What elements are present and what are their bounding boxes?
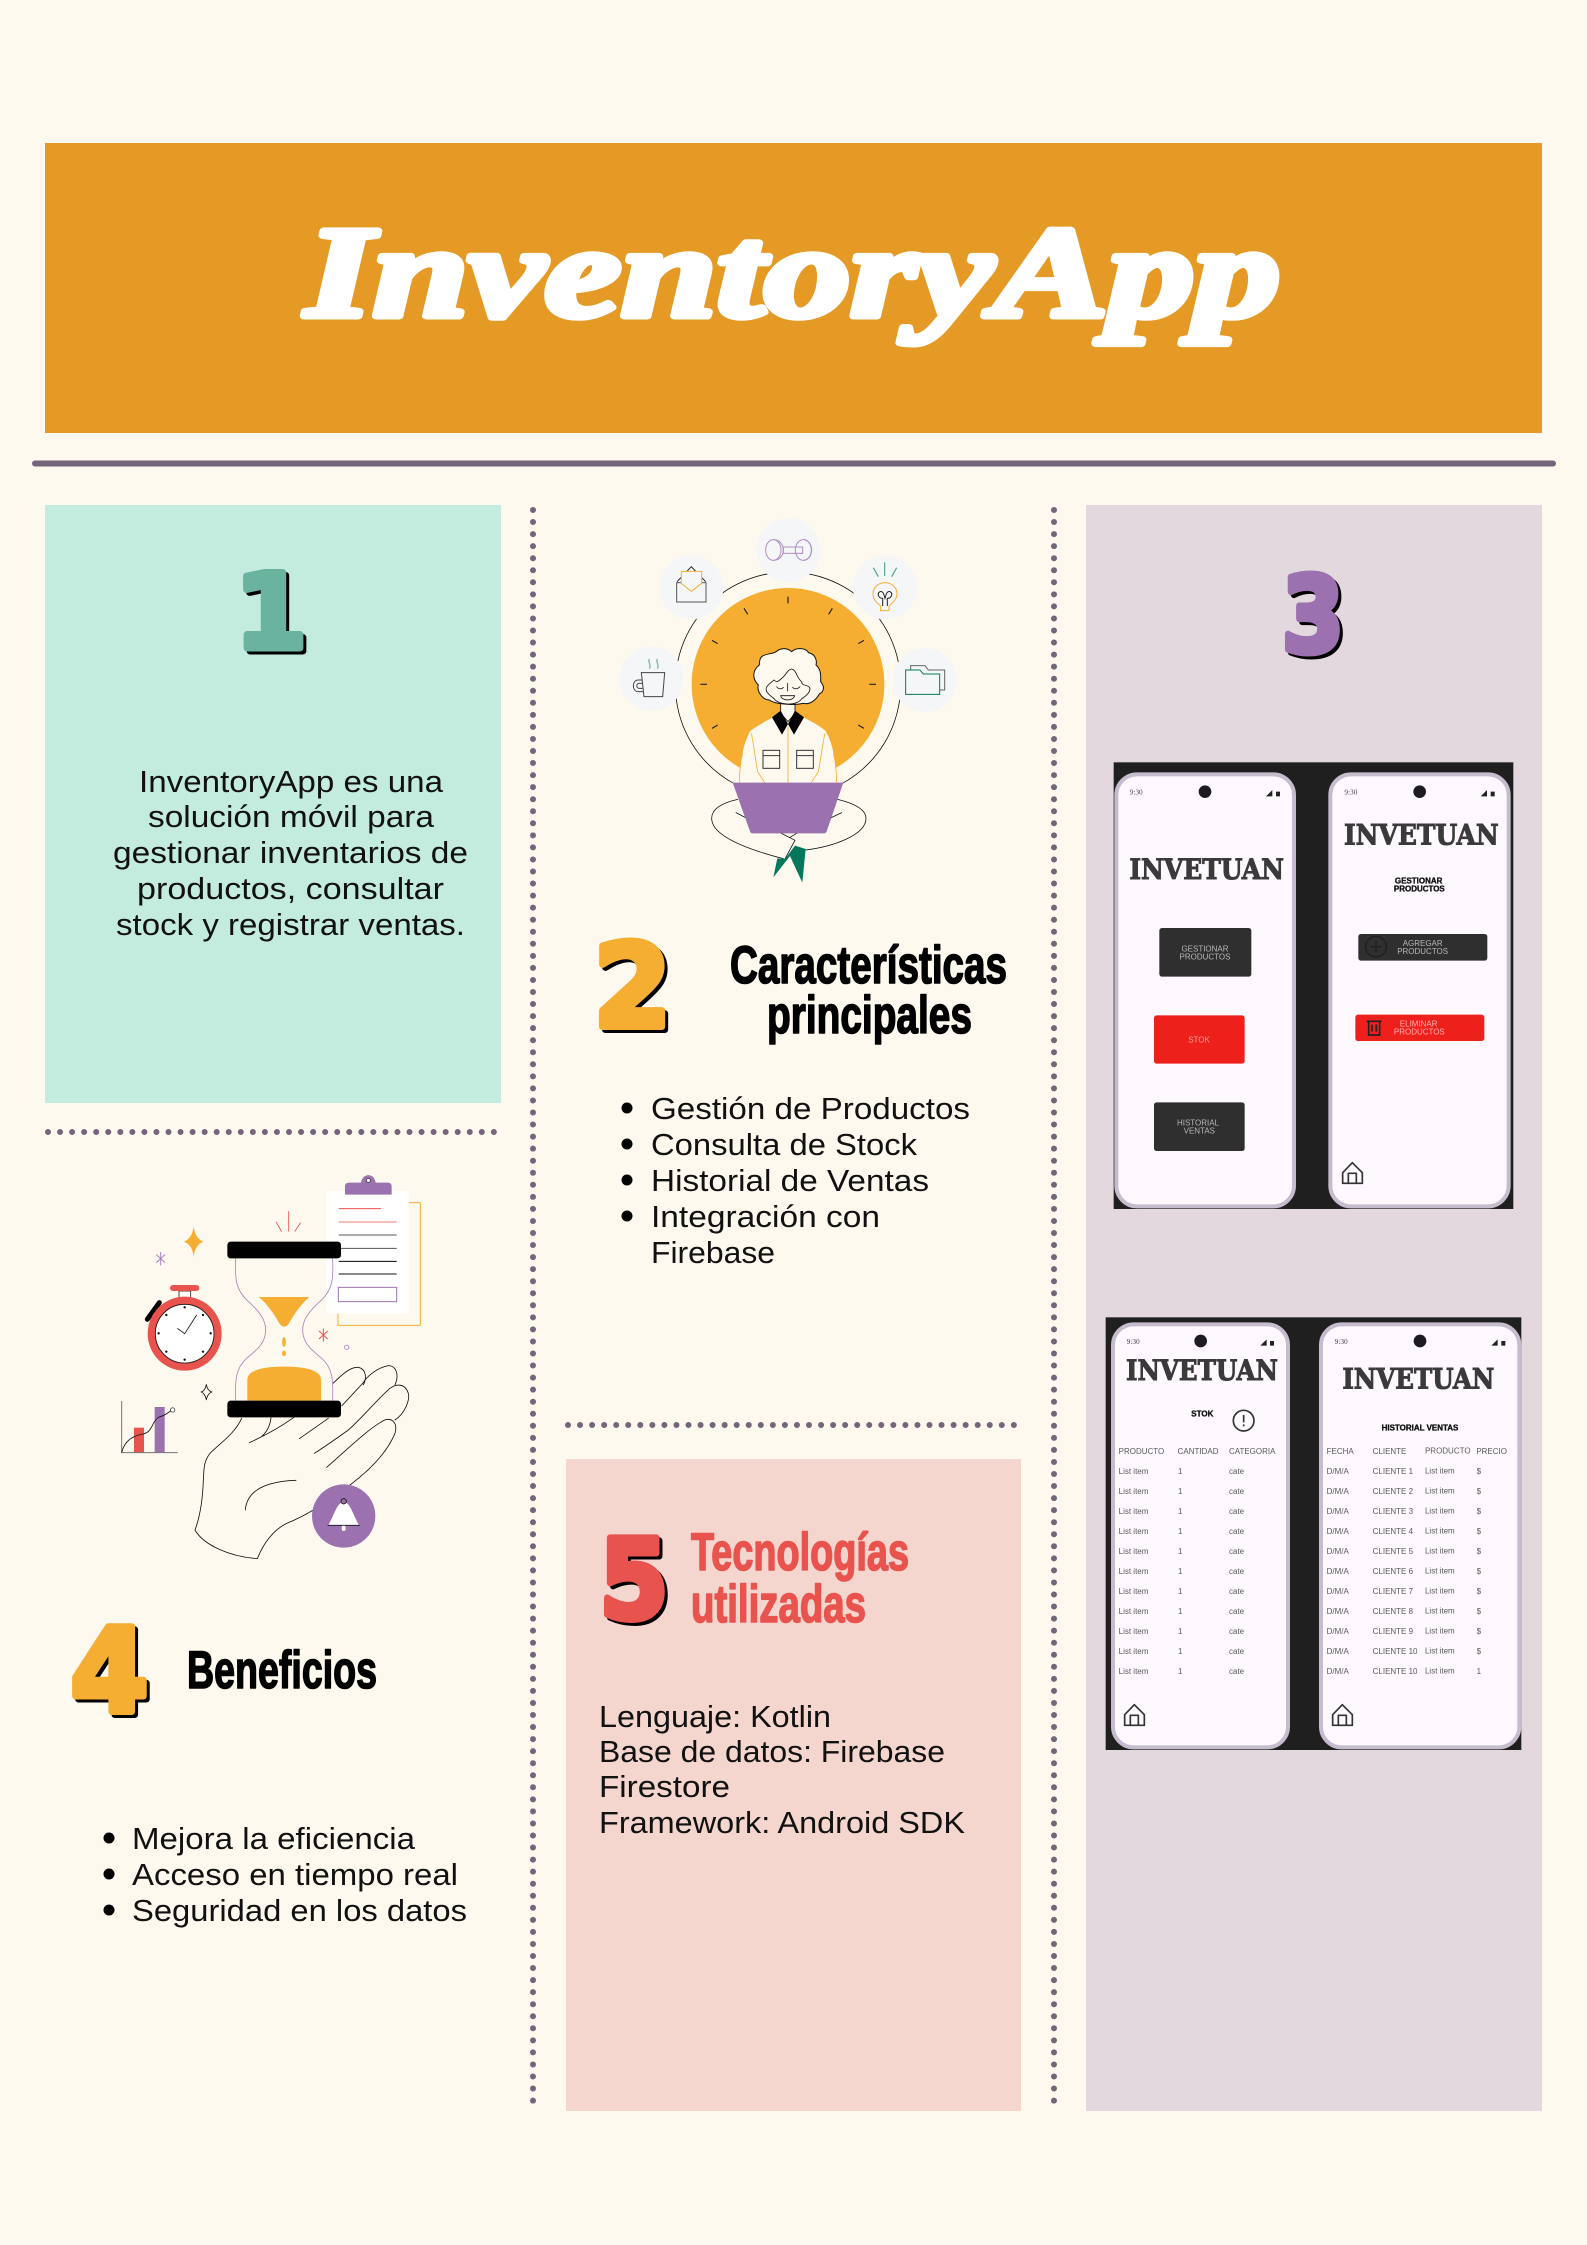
- description text: gestionar inventarios de: [113, 835, 468, 870]
- feature list: Gestión de Productos: [651, 1091, 970, 1126]
- number 5: 5: [602, 1519, 672, 1647]
- panel 3: app screenshots: [1086, 505, 1542, 2111]
- phone: stock: 1: [1178, 1487, 1183, 1496]
- phone: sales history: 1: [1477, 1667, 1482, 1676]
- phone: sales history: List item: [1425, 1507, 1455, 1516]
- phone: stock: 1: [1178, 1587, 1183, 1596]
- pockets: [763, 750, 813, 768]
- description text: productos, consultar: [137, 871, 444, 906]
- phone: home: [1116, 774, 1294, 1206]
- phone: sales history: [1321, 1324, 1519, 1747]
- phone: sales history: $: [1477, 1587, 1482, 1596]
- phone: stock: cate: [1229, 1467, 1245, 1476]
- number 1: 1: [235, 553, 307, 673]
- number 5: 5: [600, 1516, 668, 1644]
- stopwatch: [147, 1285, 222, 1371]
- phone: stock: List item: [1119, 1507, 1149, 1516]
- feature heading: [594, 920, 1007, 1058]
- phone: stock: 1: [1178, 1627, 1183, 1636]
- phone: sales history: D/M/A: [1327, 1627, 1350, 1636]
- phone: sales history: CLIENTE 8: [1373, 1607, 1414, 1616]
- sparkles: [156, 1226, 349, 1400]
- icon: bell: [312, 1484, 375, 1548]
- phone: sales history: CLIENTE 5: [1373, 1547, 1414, 1556]
- icon: dumbbell: [766, 540, 812, 560]
- phone: sales history: List item: [1425, 1527, 1455, 1536]
- phone: stock: 1: [1178, 1667, 1183, 1676]
- technologies text: Framework: Android SDK: [599, 1805, 965, 1840]
- technologies text: Firestore: [599, 1769, 730, 1804]
- phone: sales history: List item: [1425, 1487, 1455, 1496]
- phone: sales history: List item: [1425, 1627, 1455, 1636]
- hand: [195, 1366, 409, 1559]
- technologies text: Base de datos: Firebase: [599, 1734, 945, 1769]
- phone: manage products: PRODUCTOS: [1397, 947, 1448, 956]
- phone: sales history: PRODUCTO: [1425, 1447, 1471, 1456]
- phone: stock: List item: [1119, 1627, 1149, 1636]
- number 3: 3: [1282, 554, 1344, 676]
- phone: stock: cate: [1229, 1647, 1245, 1656]
- phone: sales history: List item: [1425, 1467, 1455, 1476]
- heading text: utilizadas: [691, 1575, 866, 1634]
- panel 5: technologies: [566, 1459, 1021, 2111]
- phone: stock: cate: [1229, 1507, 1245, 1516]
- description text: InventoryApp es una: [139, 764, 444, 799]
- phone: sales history: INVETUAN: [1342, 1361, 1494, 1395]
- phone: stock: List item: [1119, 1607, 1149, 1616]
- benefits list: Mejora la eficiencia: [132, 1821, 416, 1856]
- phone: sales history: CLIENTE 4: [1373, 1527, 1414, 1536]
- mini chart: [122, 1401, 178, 1453]
- phone: home: VENTAS: [1184, 1127, 1215, 1136]
- phone: stock: List item: [1119, 1547, 1149, 1556]
- phone: sales history: D/M/A: [1327, 1547, 1350, 1556]
- phone: home: HISTORIAL: [1177, 1119, 1220, 1128]
- number 4: 4: [70, 1604, 148, 1740]
- ring: [675, 572, 901, 784]
- heading text: Características: [730, 936, 1007, 995]
- phone: home: INVETUAN: [1129, 852, 1284, 886]
- description text: solución móvil para: [148, 799, 435, 834]
- phone: stock: cate: [1229, 1667, 1245, 1676]
- heading text: [730, 936, 1007, 1045]
- phone: manage products: ELIMINAR: [1400, 1020, 1438, 1029]
- clock ticks: [700, 597, 876, 728]
- phone: stock: 1: [1178, 1507, 1183, 1516]
- phone: stock: [1113, 1324, 1288, 1747]
- phone: sales history: $: [1477, 1607, 1482, 1616]
- phone: manage products: [1330, 774, 1509, 1206]
- sun: [692, 588, 884, 781]
- phone: sales history: CLIENTE 9: [1373, 1627, 1414, 1636]
- phone: stock: 9:30: [1127, 1337, 1140, 1346]
- phone: sales history: List item: [1425, 1667, 1455, 1676]
- heading text: principales: [767, 986, 972, 1045]
- phone: sales history: List item: [1425, 1587, 1455, 1596]
- icon: coffee cup: [633, 659, 665, 697]
- feature list: [622, 1091, 970, 1270]
- benefits heading: [70, 1604, 377, 1742]
- phone: stock: List item: [1119, 1567, 1149, 1576]
- phone: stock: 1: [1178, 1547, 1183, 1556]
- screenshots: stock and sales history: [1106, 1317, 1521, 1750]
- phone: sales history: CLIENTE 3: [1373, 1507, 1414, 1516]
- icon: light bulb: [873, 562, 897, 611]
- phone: stock: List item: [1119, 1467, 1149, 1476]
- title banner: [45, 143, 1542, 433]
- phone: sales history: $: [1477, 1487, 1482, 1496]
- number 2: 2: [594, 920, 672, 1054]
- phone: stock: List item: [1119, 1527, 1149, 1536]
- hair: [754, 649, 823, 704]
- phone: sales history: FECHA: [1327, 1447, 1354, 1456]
- phone: manage products: PRODUCTOS: [1394, 884, 1445, 893]
- phone: manage products: INVETUAN: [1344, 817, 1499, 851]
- face: [766, 669, 810, 704]
- phone: stock: INVETUAN: [1126, 1353, 1278, 1387]
- phone: stock: 1: [1178, 1607, 1183, 1616]
- phone: sales history: CLIENTE 10: [1373, 1667, 1418, 1676]
- phone: sales history: CLIENTE 10: [1373, 1647, 1418, 1656]
- icon backgrounds: [619, 518, 957, 712]
- phone: stock: List item: [1119, 1487, 1149, 1496]
- heading text: [691, 1523, 909, 1634]
- phone: stock: 1: [1178, 1527, 1183, 1536]
- phone: sales history: D/M/A: [1327, 1487, 1350, 1496]
- phone: stock: cate: [1229, 1547, 1245, 1556]
- phone: sales history: $: [1477, 1627, 1482, 1636]
- technologies text: Lenguaje: Kotlin: [599, 1699, 831, 1734]
- phone: sales history: List item: [1425, 1547, 1455, 1556]
- phone: sales history: CLIENTE: [1373, 1447, 1406, 1456]
- phone: home: 9:30: [1130, 788, 1143, 797]
- phone: stock: List item: [1119, 1647, 1149, 1656]
- phone: sales history: List item: [1425, 1647, 1455, 1656]
- feature list: Integración con: [651, 1199, 880, 1234]
- phone: stock: 1: [1178, 1567, 1183, 1576]
- phone: sales history: $: [1477, 1547, 1482, 1556]
- legs: [712, 799, 866, 859]
- phone: stock: CANTIDAD: [1178, 1447, 1219, 1456]
- phone: manage products: PRODUCTOS: [1394, 1028, 1445, 1037]
- illustration: person with laptop: [619, 518, 957, 883]
- feature list: Firebase: [651, 1235, 775, 1270]
- neck: [781, 703, 795, 722]
- phone: sales history: $: [1477, 1507, 1482, 1516]
- phone: stock: 1: [1178, 1467, 1183, 1476]
- phone: sales history: D/M/A: [1327, 1567, 1350, 1576]
- jacket: [739, 717, 837, 783]
- phone: sales history: CLIENTE 7: [1373, 1587, 1414, 1596]
- heading text: Tecnologías: [691, 1523, 909, 1582]
- phone: sales history: CLIENTE 1: [1373, 1467, 1414, 1476]
- phone: sales history: PRECIO: [1476, 1447, 1507, 1456]
- phone: home: GESTIONAR: [1181, 944, 1229, 953]
- icon: folders: [906, 666, 945, 694]
- phone: manage products: GESTIONAR: [1395, 876, 1443, 885]
- phone: stock: CATEGORIA: [1229, 1447, 1276, 1456]
- phone: stock: 1: [1178, 1647, 1183, 1656]
- title: InventoryApp: [303, 201, 1280, 345]
- phone: sales history: List item: [1425, 1607, 1455, 1616]
- phone: sales history: $: [1477, 1567, 1482, 1576]
- scarf: [773, 846, 806, 883]
- feature list: Consulta de Stock: [651, 1127, 918, 1162]
- phone: sales history: D/M/A: [1327, 1607, 1350, 1616]
- phone: manage products: 9:30: [1344, 788, 1358, 797]
- number 4: 4: [74, 1608, 152, 1742]
- phone: stock: PRODUCTO: [1119, 1447, 1164, 1456]
- phone: sales history: $: [1477, 1647, 1482, 1656]
- phone: stock: STOK: [1191, 1409, 1214, 1418]
- collar: [772, 711, 804, 735]
- phone: home: STOK: [1188, 1036, 1210, 1045]
- phone: sales history: HISTORIAL VENTAS: [1382, 1423, 1459, 1432]
- phone: manage products: AGREGAR: [1403, 939, 1443, 948]
- phone: stock: cate: [1229, 1487, 1245, 1496]
- phone: sales history: D/M/A: [1327, 1647, 1350, 1656]
- phone: sales history: D/M/A: [1327, 1507, 1350, 1516]
- phone: stock: cate: [1229, 1607, 1245, 1616]
- number 2: 2: [596, 924, 674, 1058]
- phone: stock: cate: [1229, 1627, 1245, 1636]
- benefits list: [104, 1821, 467, 1928]
- phone: sales history: D/M/A: [1327, 1527, 1350, 1536]
- phone: stock: List item: [1119, 1667, 1149, 1676]
- panel 1: description: [45, 505, 501, 1103]
- feature list: Historial de Ventas: [651, 1163, 929, 1198]
- description text: stock y registrar ventas.: [116, 907, 465, 942]
- phone: stock: cate: [1229, 1587, 1245, 1596]
- icon: envelope: [677, 567, 706, 602]
- phone: sales history: List item: [1425, 1567, 1455, 1576]
- phone: sales history: D/M/A: [1327, 1667, 1350, 1676]
- phone: stock: cate: [1229, 1567, 1245, 1576]
- phone: sales history: $: [1477, 1527, 1482, 1536]
- phone: sales history: CLIENTE 2: [1373, 1487, 1414, 1496]
- phone: home: PRODUCTOS: [1180, 952, 1230, 961]
- laptop: [733, 783, 843, 833]
- benefits list: Acceso en tiempo real: [132, 1857, 458, 1892]
- screenshots: home and product management: [1114, 762, 1513, 1209]
- phone: stock: cate: [1229, 1527, 1245, 1536]
- phone: sales history: $: [1477, 1467, 1482, 1476]
- phone: sales history: D/M/A: [1327, 1467, 1350, 1476]
- illustration: hourglass on hand: [122, 1175, 420, 1559]
- description text: [113, 764, 468, 942]
- hourglass: [227, 1211, 341, 1417]
- benefits list: Seguridad en los datos: [132, 1893, 467, 1928]
- phone: sales history: D/M/A: [1327, 1587, 1350, 1596]
- phone: stock: List item: [1119, 1587, 1149, 1596]
- phone: sales history: CLIENTE 6: [1373, 1567, 1414, 1576]
- clipboard: [326, 1175, 420, 1325]
- phone: sales history: 9:30: [1335, 1337, 1348, 1346]
- technologies text: [599, 1699, 965, 1840]
- number 1: 1: [238, 556, 310, 676]
- heading text: Beneficios: [187, 1641, 377, 1700]
- number 3: 3: [1285, 558, 1347, 680]
